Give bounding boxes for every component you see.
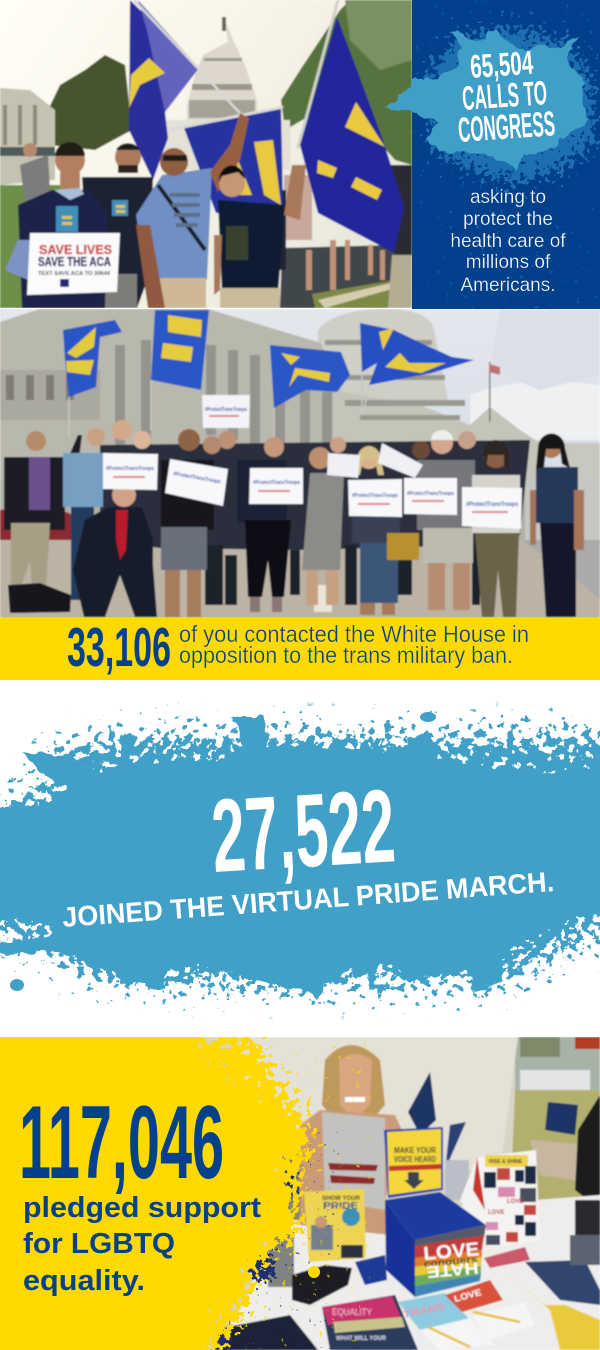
yellow paint edge <box>0 1030 306 1350</box>
person: dark top black pants <box>203 431 291 612</box>
stat: 27,522: 27,522 <box>208 768 398 895</box>
water bottle <box>445 1160 469 1200</box>
caption: pledged support for LGBTQ equality: for LGBTQ <box>23 1228 175 1260</box>
caption: pledged support for LGBTQ equality <box>23 1192 261 1297</box>
description: asking to protect health care <box>450 187 566 296</box>
flyer: show your pride: SHOW YOUR <box>322 1196 361 1202</box>
ballot box: love conquers hate: HATE <box>426 1258 479 1281</box>
photo: activists with flags at the Capitol <box>0 0 412 308</box>
panel: 65,504 calls to Congress <box>388 0 600 309</box>
description: asking to protect health care: health care of <box>450 231 566 252</box>
flag: left <box>129 0 199 180</box>
description: asking to protect health care: Americans. <box>460 275 556 296</box>
sign: save lives save the ACA <box>27 233 120 295</box>
paint speckle <box>0 733 600 988</box>
flyer: show your pride: PRIDE <box>323 1201 358 1212</box>
photo: group with trans troops signs at the Capitol <box>0 309 600 618</box>
description: opposition to trans military ban <box>179 621 529 668</box>
paint splat <box>0 717 600 1000</box>
band: 33,106 contacted the White House <box>0 616 600 680</box>
paint splat <box>388 28 589 170</box>
stat: 117,046: 117,046 <box>19 1085 224 1201</box>
sign: trans troops 4 <box>249 468 303 504</box>
person: man in grey tee <box>412 430 476 610</box>
sticker display board: LOVE <box>507 1199 523 1205</box>
sign: trans troops 3: #ProtectTransTroops <box>173 471 221 485</box>
person: smiling man raising arm <box>214 165 306 308</box>
panel: 117,046 pledged support <box>0 1030 320 1350</box>
sticker display board <box>460 1150 540 1248</box>
paint drops <box>10 712 436 991</box>
sign: trans troops 7: #ProtectTransTroops <box>466 502 519 508</box>
sign: make your voice heard: VOICE HEARD <box>394 1154 436 1164</box>
stat: 33,106: 33,106 <box>67 616 171 678</box>
pile of swag bags <box>292 1265 352 1305</box>
sign: trans troops 1: #ProtectTransTroops <box>106 466 154 472</box>
sign: trans troops 1 <box>103 453 158 490</box>
sign: trans troops 3 <box>165 459 228 506</box>
yellow paint speckle <box>170 1037 312 1350</box>
flyer: show your pride <box>304 1189 366 1262</box>
brochures stacked on table: LOVE <box>453 1287 483 1304</box>
person: man in blue tee <box>136 113 249 308</box>
ballot box: love conquers hate: conquers <box>423 1254 478 1269</box>
person: man with glasses <box>82 143 153 308</box>
stat: 65,504 calls to Congress: 65,504 <box>469 44 535 85</box>
description: opposition to trans military ban: opposition to the trans military ban. <box>179 642 513 668</box>
sign: save lives save the ACA: SAVE THE ACA <box>38 254 111 269</box>
sticker display board: RISE & SHINE <box>489 1159 523 1165</box>
sticker display board: LOVE <box>488 1210 504 1216</box>
person: smiling blonde woman <box>300 1045 402 1235</box>
brochures stacked on table: EQUALITY <box>332 1307 372 1317</box>
sign: trans troops 4: #ProtectTransTroops <box>253 480 300 486</box>
brochures stacked on table: WHAT WILL YOUR <box>336 1336 387 1342</box>
backpack <box>8 583 71 613</box>
small flags <box>408 1072 436 1135</box>
person: kneeling man in suit <box>73 483 157 617</box>
sign: trans troops 2: #ProtectTransTroops <box>205 407 247 413</box>
person: woman in navy at right <box>530 433 584 617</box>
person: man in suit left <box>4 431 82 590</box>
person: woman with yellow bag <box>352 446 419 615</box>
brochures stacked on table <box>322 1200 600 1350</box>
sign: save lives save the ACA: SAVE LIVES <box>39 242 112 257</box>
navy t-shirt <box>212 1315 318 1350</box>
flags on poles <box>63 310 474 438</box>
ballot box: love conquers hate: LOVE <box>423 1239 480 1265</box>
flag: centre <box>183 104 284 214</box>
sign: trans troops 6: #ProtectTransTroops <box>407 491 454 497</box>
crowd background <box>100 440 530 550</box>
sign: trans troops 5: #ProtectTransTroops <box>352 493 398 499</box>
person: woman in striped top <box>472 440 520 617</box>
person: man with HRC shirt holding sign <box>5 142 107 308</box>
sign: trans troops 5 <box>348 479 402 517</box>
splatter halo <box>425 28 598 185</box>
description: asking to protect health care: protect the <box>463 209 553 230</box>
sign: make your voice heard: MAKE YOUR <box>394 1145 436 1155</box>
panel: 27,522 joined the virtual pride march <box>0 712 600 1000</box>
person: woman in patterned dress <box>302 437 346 605</box>
description: asking to protect health care: asking to <box>470 187 546 208</box>
sign: trans troops 6 <box>404 478 457 515</box>
person: blue shirt <box>63 420 151 600</box>
navy paint flecks <box>212 1170 297 1348</box>
yellow dot <box>308 1266 320 1278</box>
person: patterned shorts <box>161 429 214 617</box>
brochures stacked on table: TRANS <box>402 1301 446 1321</box>
caption: joined the virtual pride march: JOINED THE VIRTUAL PRIDE MARCH. <box>61 866 555 933</box>
ballot box: love conquers hate <box>385 1192 486 1297</box>
description: asking to protect health care: millions of <box>466 252 551 273</box>
sign: trans troops 7 <box>462 487 522 529</box>
sign: trans troops 8 <box>327 443 423 478</box>
caption: pledged support for LGBTQ equality: equality. <box>23 1265 145 1297</box>
photo: volunteer at pride booth <box>198 1037 600 1350</box>
sign: make your voice heard <box>384 1127 443 1198</box>
stat: 65,504 calls to Congress <box>457 44 556 150</box>
sign: save lives save the ACA: TEXT SAVE ACA TO 30644 <box>38 271 110 277</box>
flag: right <box>298 0 404 253</box>
sign: trans troops 2 <box>202 395 250 428</box>
caption: pledged support for LGBTQ equality: pledged support <box>23 1192 261 1224</box>
description: opposition to trans military ban: of you contacted the White House in <box>179 621 529 647</box>
